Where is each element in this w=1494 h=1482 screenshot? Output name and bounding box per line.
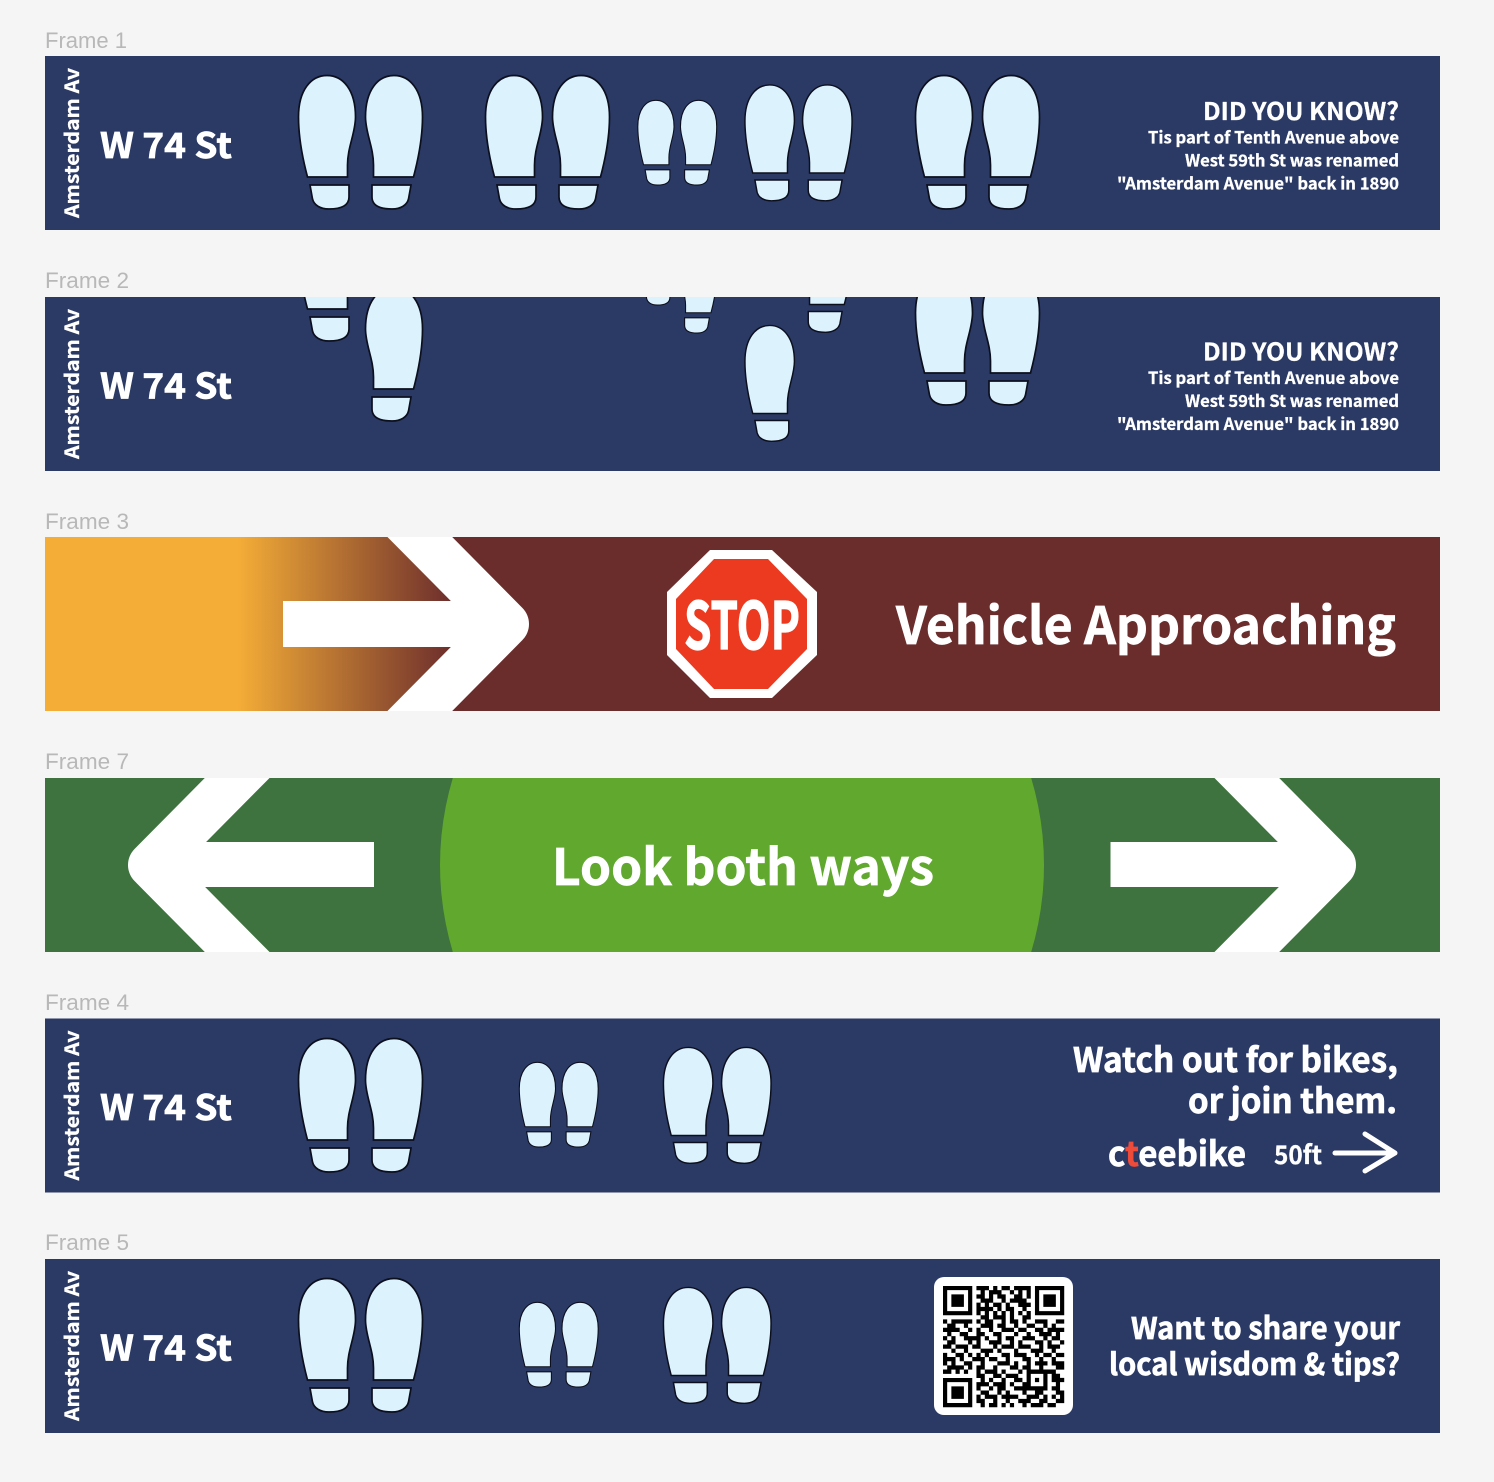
panel: Frame 1 street sign <box>45 56 1440 230</box>
icon: footprints pair 2 <box>486 76 610 209</box>
icon: footprints small pair <box>519 1302 598 1387</box>
icon: footprints large pair <box>298 1038 422 1172</box>
icon: footprints large pair <box>298 1278 422 1412</box>
orange headlight glow <box>45 537 455 711</box>
icon: footprints pair 5 <box>916 76 1040 209</box>
panel: Frame 2 street sign <box>45 297 1440 471</box>
panel: Frame 4 bike share sign <box>45 1018 1440 1192</box>
arrow: right <box>283 520 506 728</box>
icon: stop sign <box>667 550 817 698</box>
warning text: Vehicle Approaching <box>895 585 1396 659</box>
did you know text: Tis part of Tenth Avenue above <box>1148 365 1399 389</box>
frame label: Frame 5: Frame 5 <box>45 1230 129 1255</box>
did you know text: "Amsterdam Avenue" back in 1890 <box>1117 411 1399 435</box>
message text: Look both ways <box>552 828 934 900</box>
icon: footprints medium pair <box>663 1047 771 1163</box>
arrow: left <box>151 761 374 969</box>
share tips message: Want to share your <box>1131 1304 1401 1348</box>
QR code <box>934 1277 1073 1415</box>
did you know text: DID YOU KNOW? <box>1203 334 1399 368</box>
street name: W 74 St <box>100 1080 232 1131</box>
frame label: Frame 7: Frame 7 <box>45 749 129 774</box>
arrow: right <box>1110 761 1333 969</box>
green centre circle <box>440 778 1044 952</box>
avenue name: Amsterdam Av <box>56 1030 85 1182</box>
icon: footprints small pair <box>638 100 717 185</box>
frame label: Frame 4: Frame 4 <box>45 990 129 1015</box>
street name: W 74 St <box>100 1320 232 1372</box>
did you know text: DID YOU KNOW? <box>1203 93 1399 128</box>
did you know text: "Amsterdam Avenue" back in 1890 <box>1117 170 1399 194</box>
icon: animated footprints <box>304 297 1040 442</box>
avenue name: Amsterdam Av <box>56 309 85 460</box>
avenue name: Amsterdam Av <box>56 1271 85 1422</box>
bike share logo: cteebike <box>1108 1127 1246 1176</box>
did you know text: Tis part of Tenth Avenue above <box>1148 124 1399 148</box>
did you know text: West 59th St was renamed <box>1185 148 1399 172</box>
did you know text <box>1117 93 1399 194</box>
frame label: Frame 2: Frame 2 <box>45 268 129 293</box>
distance: 50ft <box>1274 1135 1322 1172</box>
street name: W 74 St <box>100 358 232 410</box>
share tips message <box>1109 1304 1401 1384</box>
bike message <box>1073 1033 1398 1123</box>
bike message: Watch out for bikes, <box>1073 1033 1398 1082</box>
icon: footprints small pair <box>519 1062 598 1147</box>
street name: W 74 St <box>100 118 232 169</box>
icon: footprints medium pair <box>663 1287 771 1403</box>
icon: stop sign: STOP <box>684 574 800 668</box>
avenue name: Amsterdam Av <box>56 68 85 219</box>
share tips message: local wisdom & tips? <box>1109 1340 1400 1384</box>
frame label: Frame 1: Frame 1 <box>45 28 127 53</box>
did you know text <box>1117 334 1399 435</box>
icon: footprints medium pair <box>745 85 852 201</box>
did you know text: West 59th St was renamed <box>1185 388 1399 412</box>
panel: Frame 7 look both ways <box>45 778 1440 952</box>
bike message: or join them. <box>1188 1074 1397 1123</box>
panel: Frame 5 share tips sign <box>45 1259 1440 1433</box>
arrow: distance <box>1335 1134 1395 1171</box>
frame label: Frame 3: Frame 3 <box>45 509 129 534</box>
panel: Frame 3 vehicle warning <box>45 537 1440 711</box>
icon: footprints pair 1 <box>298 76 422 209</box>
